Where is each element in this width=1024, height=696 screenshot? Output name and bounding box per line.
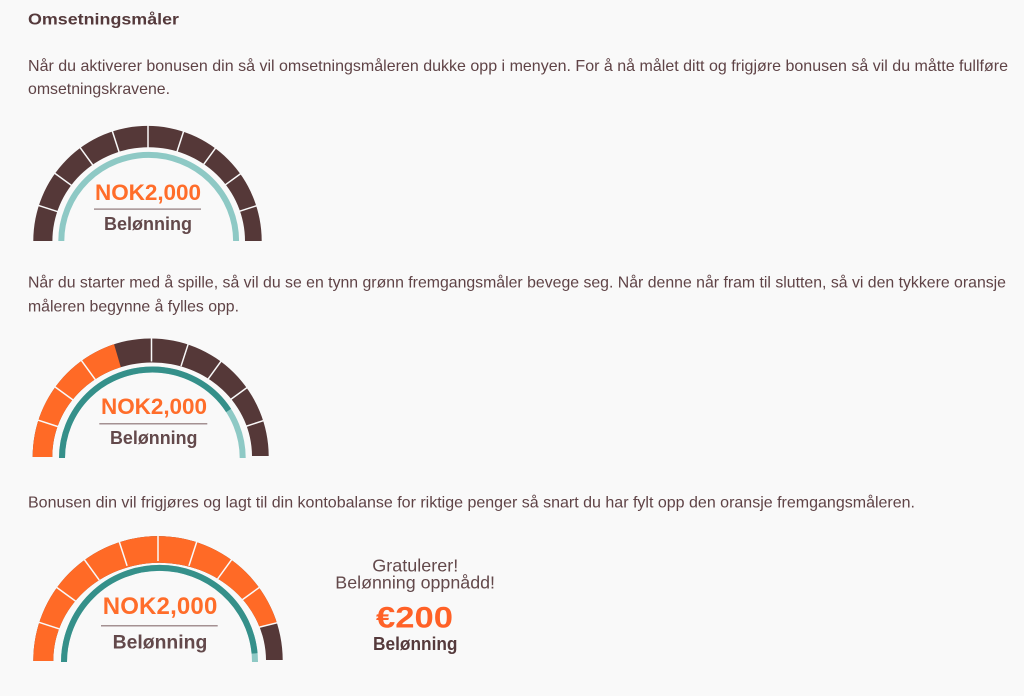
thin meter: light teal base (62, 369, 243, 458)
reward achieved callout (335, 556, 495, 654)
reward label: Belønning (110, 428, 198, 448)
third paragraph: Bonusen din vil frigjøres og lagt til din kontobalanse for riktige penger så snart du har fylt opp den oransje fremgangsmåleren. (28, 494, 915, 512)
gauge 1: empty (33, 123, 262, 241)
thin meter: dark teal progress (62, 369, 243, 458)
thin meter: light teal (61, 155, 236, 241)
reward achieved callout: Belønning oppnådd! (335, 572, 495, 592)
thick meter: brown base (33, 536, 283, 661)
intro paragraph: omsetningskravene. (28, 81, 170, 98)
second paragraph: Når du starter med å spille, så vil du se en tynn grønn fremgangsmåler bevege seg. Når denne når fram til slutten, så vi den tykkere oransje (28, 273, 1006, 291)
thick meter: four orange segments (32, 344, 121, 457)
amount: NOK2,000 (103, 593, 217, 620)
intro paragraph (28, 57, 1008, 98)
thick meter: nine orange segments (33, 536, 283, 661)
amount: NOK2,000 (95, 180, 201, 205)
thin meter: light teal base (64, 568, 255, 662)
thick meter: brown base (33, 338, 269, 457)
second paragraph (28, 273, 1006, 316)
congratulations text: Gratulerer! (372, 556, 458, 576)
thick meter: empty (33, 126, 262, 241)
divider (101, 625, 218, 626)
reward label: Belønning (104, 214, 192, 234)
reward label: Belønning (373, 634, 458, 654)
divider (94, 208, 201, 210)
thin meter: dark teal progress (64, 568, 255, 662)
gauge 3: nearly full (33, 531, 283, 662)
heading: Omsetningsmåler (28, 10, 179, 28)
amount: NOK2,000 (101, 394, 207, 419)
second paragraph: måleren begynne å fylles opp. (28, 298, 239, 316)
gauge 2: in progress (33, 334, 269, 458)
reward label: Belønning (113, 632, 207, 653)
reward amount: €200 (376, 602, 453, 635)
intro paragraph: Når du aktiverer bonusen din så vil omsetningsmåleren dukke opp i menyen. For å nå målet ditt og frigjøre bonusen så vil du måtte fullføre (28, 57, 1008, 75)
divider (99, 423, 207, 424)
